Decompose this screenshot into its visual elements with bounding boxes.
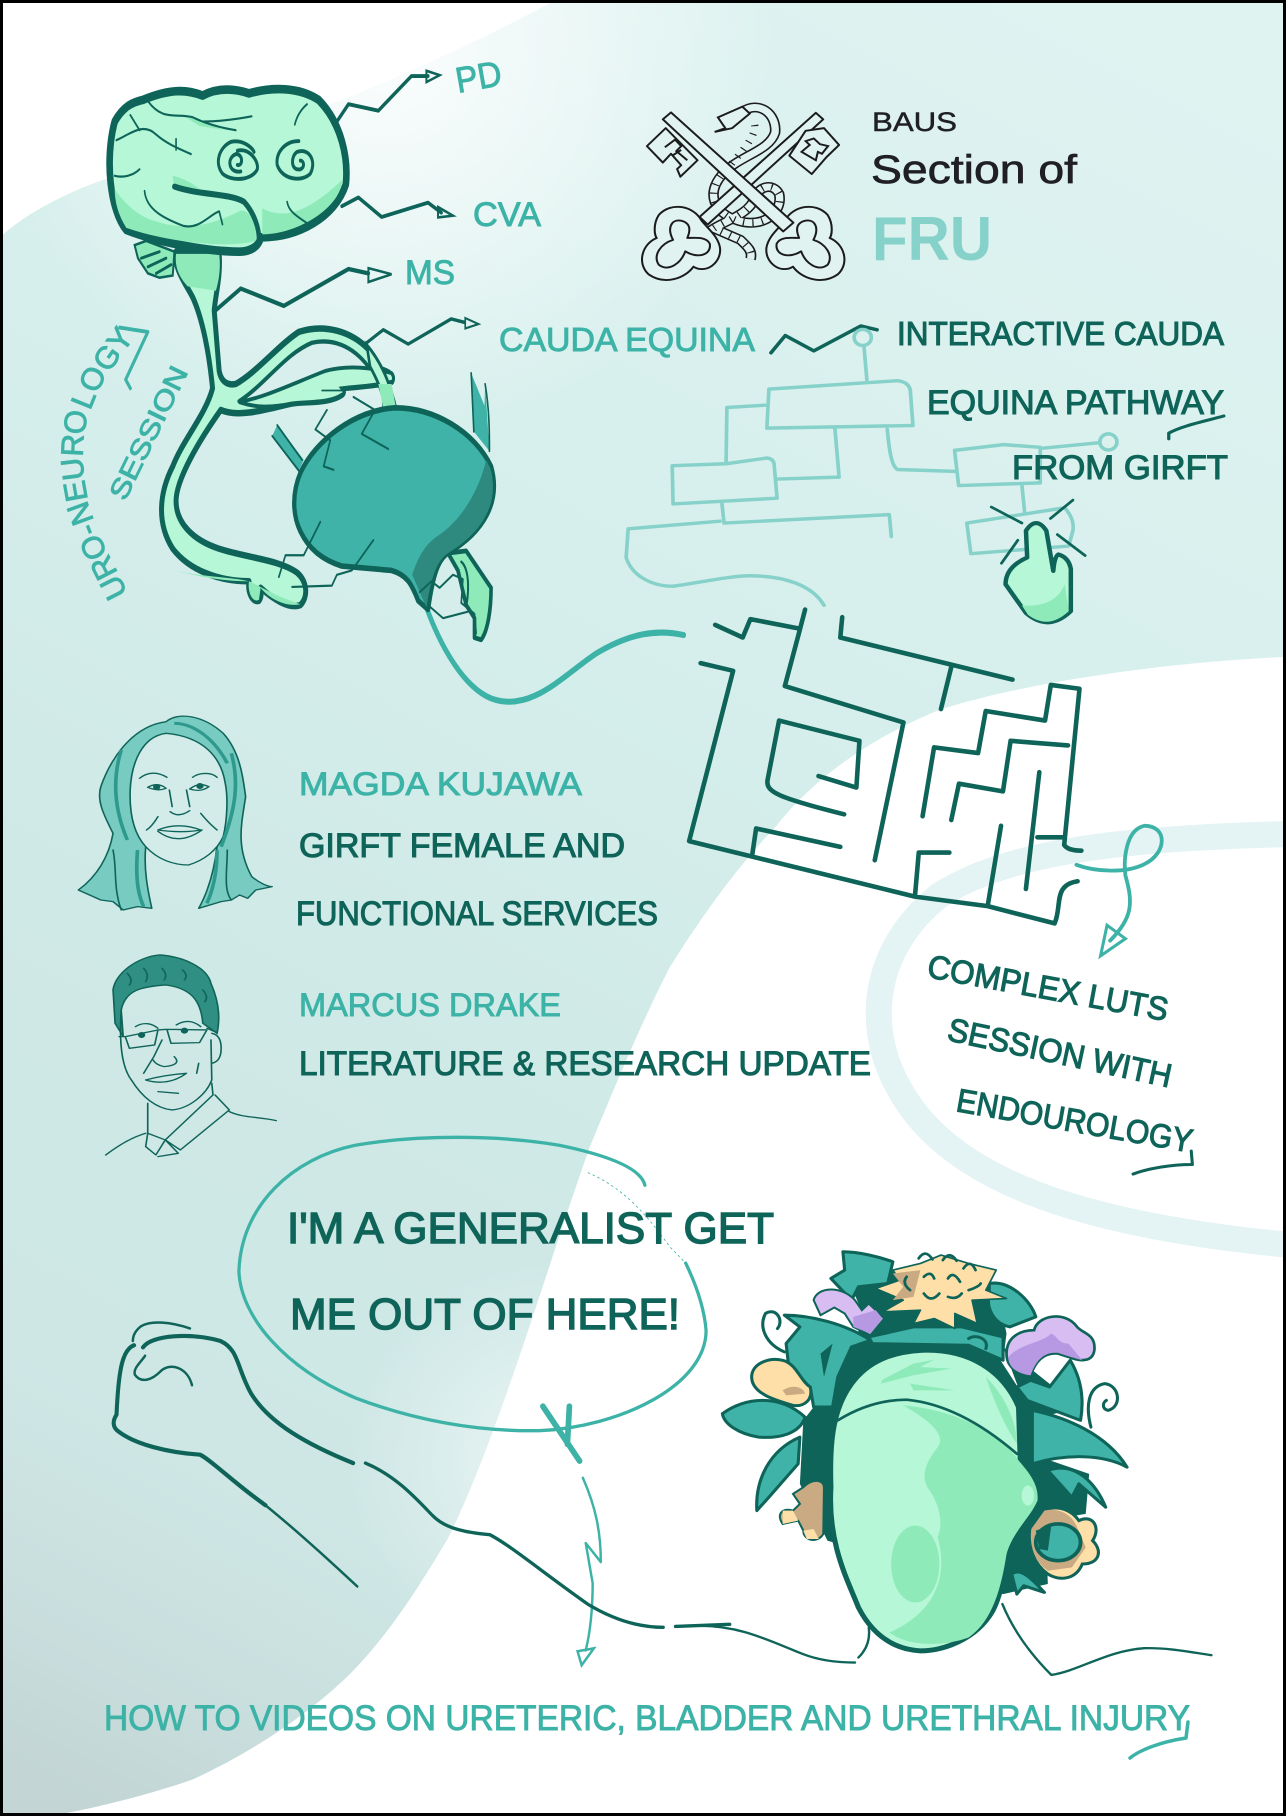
shoulder lines [700,1604,1211,1675]
portrait: Marcus Drake [106,955,276,1157]
brain [110,89,346,252]
portrait: Magda Kujawa [78,716,272,910]
speech bubble and arm [114,1137,730,1665]
swash under pathway [1169,416,1224,439]
label: CVA: CVA [473,196,541,234]
footer text: how to videos: HOW TO VIDEOS ON URETERIC, BLADDER AND URETHRAL INJURY [104,1699,1190,1738]
heading: FRU: FRU [872,205,992,274]
speaker topic: functional services: FUNCTIONAL SERVICES [296,895,658,933]
flowers [722,1254,1098,1578]
session label: Uro-Neurology Session: SESSION [103,361,194,505]
text: From GIRFT: FROM GIRFT [1012,449,1228,487]
swash under Endourology [1133,1151,1192,1174]
text: me out of here!: ME OUT OF HERE! [290,1290,680,1339]
key shafts and bits [647,112,839,231]
label: MS: MS [405,254,455,292]
illustration: brain, spinal cord and bladder [110,71,684,702]
speech bubble outline [239,1137,706,1461]
label: PD: PD [452,53,505,101]
icon: clicking hand [991,500,1085,622]
spinal cord nerve [135,241,396,606]
swash under injury [1130,1722,1188,1758]
speaker topic: literature and research update: LITERATURE & RESEARCH UPDATE [299,1045,871,1083]
speaker name: Marcus Drake: MARCUS DRAKE [299,987,561,1023]
logo: crossed keys and serpent [642,107,844,280]
key handles [642,207,844,280]
urethra tube [426,607,684,702]
text: I'm a generalist get: I'M A GENERALIST GET [287,1204,774,1253]
bladder [272,373,494,640]
text: Complex LUTS: COMPLEX LUTS [925,947,1171,1028]
heading: Section of: Section of [871,148,1078,192]
text: Endourology: ENDOUROLOGY [954,1081,1196,1159]
arrow: to how-to videos [578,1478,601,1665]
text: Interactive Cauda: INTERACTIVE CAUDA [897,315,1224,352]
flowchart: interactive pathway [626,326,1224,622]
hair [757,1252,1127,1594]
serpent [714,107,780,259]
label: Cauda Equina: CAUDA EQUINA [499,321,755,358]
session label: Uro-Neurology Session: URO-NEUROLOGY [54,321,140,606]
arrow lines to neurological conditions [216,71,478,344]
arm and fist [114,1322,730,1627]
session label: Uro-Neurology Session [54,321,194,606]
illustration: woman's face with floral hair [700,1252,1211,1675]
text: Equina Pathway: EQUINA PATHWAY [927,384,1224,422]
speaker topic: GIRFT female and: GIRFT FEMALE AND [299,827,625,865]
face [830,1350,1039,1651]
text: Session with: SESSION WITH [945,1011,1175,1094]
heading: BAUS: BAUS [872,107,957,137]
maze [689,610,1192,1174]
arrow: loop to complex LUTS [1076,826,1162,956]
speaker name: Magda Kujawa: MAGDA KUJAWA [299,766,583,802]
